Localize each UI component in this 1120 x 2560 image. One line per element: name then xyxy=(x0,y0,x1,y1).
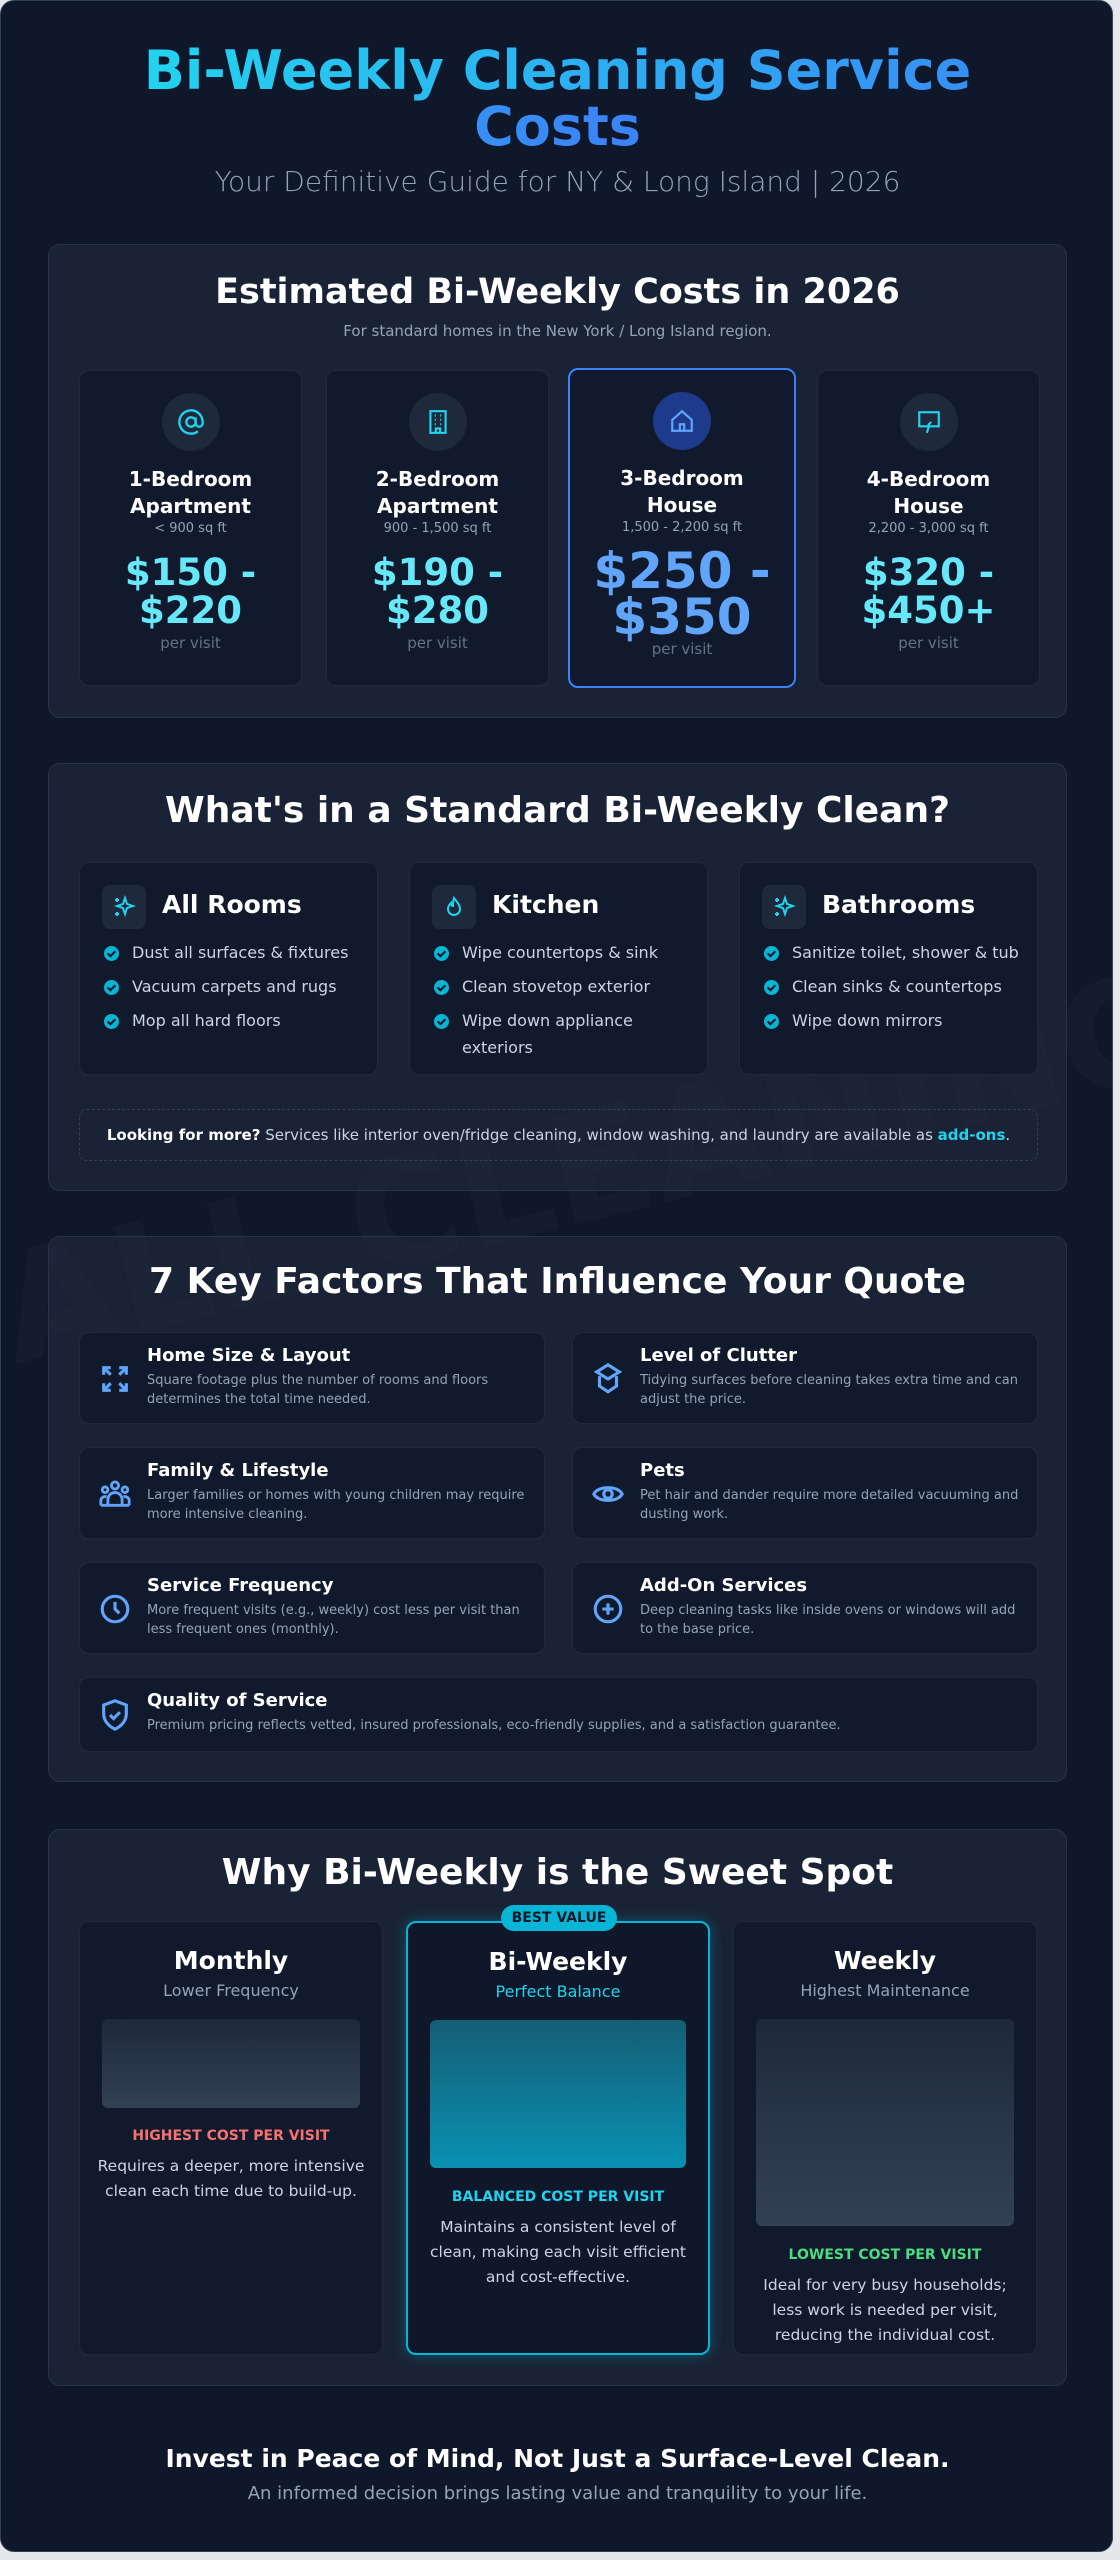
card: 2-bedroom: 900 - 1,500 sq ft xyxy=(384,521,491,536)
heading: factors: 7 Key Factors That Influence Your Quote xyxy=(149,1261,966,1302)
title: Bi-Weekly Cleaning Service xyxy=(144,39,971,102)
card: bi-weekly: Maintains a consistent level of clean, making each visit efficient and cost-effective. xyxy=(430,2218,686,2286)
card: bathrooms xyxy=(739,862,1038,1075)
factor: clutter: Tidying surfaces before cleaning takes extra time and can adjust the price. xyxy=(640,1373,1018,1407)
callout: add-ons: Looking for more? Services like interior oven/fridge cleaning, window washing, and laundry are available as add-ons. xyxy=(107,1126,1010,1144)
card: 3-bedroom highlighted: $250 - xyxy=(593,542,771,600)
card: 1-bedroom: per visit xyxy=(160,634,221,652)
heading: costs: Estimated Bi-Weekly Costs in 2026 xyxy=(215,272,900,312)
subheading: For standard homes in the New York / Long Island region. xyxy=(343,322,772,340)
card: monthly: Requires a deeper, more intensive clean each time due to build-up. xyxy=(98,2157,364,2200)
card: 2-bedroom xyxy=(326,370,549,686)
icon: flame xyxy=(432,885,476,929)
card: 4-bedroom: House xyxy=(893,494,964,518)
factor: frequency: More frequent visits (e.g., weekly) cost less per visit than less frequent ones (monthly). xyxy=(147,1603,520,1637)
factor: family: Family & Lifestyle xyxy=(147,1460,329,1481)
card: 1-bedroom xyxy=(79,370,302,686)
card: bi-weekly: Perfect Balance xyxy=(496,1982,620,2001)
icon: house xyxy=(653,392,711,450)
title: Costs xyxy=(474,95,641,158)
bar: monthly xyxy=(102,2019,360,2108)
factor: pets: Pet hair and dander require more detailed vacuuming and dusting work. xyxy=(640,1488,1018,1522)
icon: expand xyxy=(102,1366,128,1392)
card: 4-bedroom: 2,200 - 3,000 sq ft xyxy=(868,521,989,536)
card: kitchen: Wipe countertops & sink xyxy=(462,943,658,962)
icon: plus circle xyxy=(594,1594,622,1624)
card: monthly: Lower Frequency xyxy=(163,1981,299,2000)
icon: building xyxy=(408,393,466,451)
card: 3-bedroom highlighted: $350 xyxy=(612,588,752,646)
card: bathrooms: Wipe down mirrors xyxy=(792,1011,943,1030)
card: 3-bedroom highlighted: House xyxy=(647,493,717,517)
card: monthly: HIGHEST COST PER VISIT xyxy=(132,2128,330,2144)
card: 1-bedroom: < 900 sq ft xyxy=(154,521,227,536)
card: 2-bedroom: Apartment xyxy=(377,494,498,518)
card: bathrooms: Sanitize toilet, shower & tub xyxy=(792,943,1019,962)
factor: quality: Quality of Service xyxy=(147,1690,328,1711)
subtitle: Your Definitive Guide for NY & Long Island | 2026 xyxy=(215,165,900,198)
factor: quality: Premium pricing reflects vetted, insured professionals, eco-friendly supplies, and a satisfaction guarantee. xyxy=(147,1718,841,1733)
panel: sweet spot xyxy=(48,1829,1067,2386)
factor: clutter xyxy=(572,1332,1038,1424)
icon: shield xyxy=(102,1699,128,1731)
factor: family xyxy=(79,1447,545,1539)
footer heading: Invest in Peace of Mind, Not Just a Surface-Level Clean. xyxy=(165,2444,950,2473)
card: bi-weekly xyxy=(406,1921,710,2355)
icon: clock xyxy=(100,1594,130,1624)
factor: add-ons: Add-On Services xyxy=(640,1575,807,1596)
factor: pets xyxy=(572,1447,1038,1539)
card: 4-bedroom: $320 - xyxy=(863,551,994,594)
card: bathrooms: Clean sinks & countertops xyxy=(792,977,1002,996)
factor: clutter: Level of Clutter xyxy=(640,1345,797,1366)
card: 2-bedroom: 2-Bedroom xyxy=(376,467,499,491)
badge: best value xyxy=(501,1905,617,1931)
panel: estimated costs xyxy=(48,244,1067,718)
card: kitchen: Wipe down appliance exteriors xyxy=(462,1011,633,1057)
card: 3-bedroom highlighted: per visit xyxy=(652,640,712,658)
title xyxy=(144,39,971,158)
card: weekly: Highest Maintenance xyxy=(800,1981,970,2000)
footer subtext: An informed decision brings lasting value and tranquility to your life. xyxy=(248,2483,867,2504)
card: weekly xyxy=(733,1921,1037,2355)
factor: add-ons: Deep cleaning tasks like inside ovens or windows will add to the base price. xyxy=(640,1603,1015,1637)
card: bi-weekly: Bi-Weekly xyxy=(489,1947,627,1976)
icon: display xyxy=(900,393,958,451)
factor: quality xyxy=(79,1677,1038,1752)
card: 4-bedroom xyxy=(817,370,1040,686)
card: bi-weekly: BALANCED COST PER VISIT xyxy=(452,2189,664,2205)
card: kitchen: Kitchen xyxy=(492,890,599,919)
card: kitchen xyxy=(409,862,708,1075)
card: 1-bedroom: $150 - xyxy=(125,551,256,594)
card: weekly: Ideal for very busy households; less work is needed per visit, reducing the individual cost. xyxy=(763,2276,1007,2344)
factor: family: Larger families or homes with young children may require more intensive cleaning. xyxy=(147,1488,524,1522)
card: 1-bedroom: Apartment xyxy=(130,494,251,518)
card: 4-bedroom: per visit xyxy=(898,634,959,652)
card: 3-bedroom highlighted: 1,500 - 2,200 sq ft xyxy=(622,520,742,535)
card: weekly: Weekly xyxy=(834,1946,936,1975)
card: all rooms: Mop all hard floors xyxy=(132,1011,281,1030)
card: 3-bedroom highlighted: 3-Bedroom xyxy=(620,466,744,490)
factor: home size: Home Size & Layout xyxy=(147,1345,350,1366)
bar: weekly xyxy=(756,2019,1014,2226)
icon: at xyxy=(162,393,220,451)
panel: key factors xyxy=(48,1236,1067,1782)
card: all rooms: All Rooms xyxy=(162,890,302,919)
card: all rooms: Vacuum carpets and rugs xyxy=(132,977,337,996)
card: 1-bedroom: $220 xyxy=(139,589,242,632)
card: kitchen: Clean stovetop exterior xyxy=(462,977,650,996)
card: 3-bedroom highlighted xyxy=(568,368,796,688)
card: all rooms: Dust all surfaces & fixtures xyxy=(132,943,348,962)
card: 2-bedroom: per visit xyxy=(407,634,468,652)
card: 1-bedroom: 1-Bedroom xyxy=(129,467,252,491)
factor: frequency: Service Frequency xyxy=(147,1575,333,1596)
card: 4-bedroom: 4-Bedroom xyxy=(867,467,990,491)
heading: sweet spot: Why Bi-Weekly is the Sweet Spot xyxy=(222,1852,893,1893)
heading: standard clean: What's in a Standard Bi-Weekly Clean? xyxy=(165,790,950,831)
bar: bi-weekly xyxy=(430,2020,686,2168)
factor: home size: Square footage plus the number of rooms and floors determines the total time needed. xyxy=(147,1373,488,1407)
icon: eye xyxy=(592,1486,624,1502)
icon: boxes xyxy=(594,1363,622,1394)
callout: add-ons xyxy=(79,1109,1038,1161)
factor: frequency xyxy=(79,1562,545,1654)
card: 2-bedroom: $190 - xyxy=(372,551,503,594)
panel: standard clean xyxy=(48,763,1067,1191)
card: all rooms xyxy=(79,862,378,1075)
badge: best value: BEST VALUE xyxy=(512,1910,606,1926)
card: 2-bedroom: $280 xyxy=(386,589,489,632)
card: weekly: LOWEST COST PER VISIT xyxy=(789,2247,981,2263)
card: 4-bedroom: $450+ xyxy=(862,589,995,632)
icon: sparkle xyxy=(102,885,146,929)
icon: sparkle xyxy=(762,885,806,929)
card: bathrooms: Bathrooms xyxy=(822,890,975,919)
icon: people xyxy=(99,1480,131,1507)
card: monthly xyxy=(79,1921,383,2355)
card: monthly: Monthly xyxy=(174,1946,288,1975)
factor: pets: Pets xyxy=(640,1460,685,1481)
factor: home size xyxy=(79,1332,545,1424)
factor: add-ons xyxy=(572,1562,1038,1654)
